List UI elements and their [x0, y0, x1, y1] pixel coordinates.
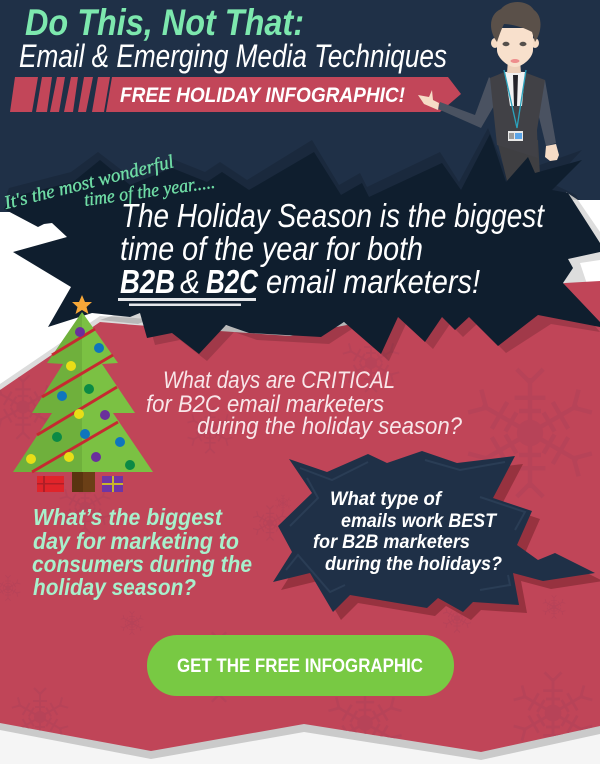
banner text: FREE HOLIDAY INFOGRAPHIC! — [120, 84, 405, 107]
grey shadow of red section bottom — [0, 700, 600, 760]
snowflakes background pattern — [0, 334, 593, 761]
title: Do This, Not That: Do This, Not That: — [25, 2, 304, 43]
small burst text: during the holidays? — [325, 554, 502, 575]
banner: free holiday infographic — [10, 77, 461, 112]
main statement line three: & — [180, 263, 200, 300]
main statement line three — [120, 263, 480, 300]
main statement line three: email marketers! — [266, 263, 480, 300]
mouth — [510, 59, 520, 63]
left arm — [438, 77, 502, 128]
green question — [32, 504, 252, 600]
right hand — [545, 144, 559, 161]
small burst shadow — [281, 459, 600, 620]
tree body right — [82, 312, 153, 472]
dark left header edge — [0, 200, 70, 212]
white band — [0, 190, 600, 390]
grey edge at right side — [560, 248, 600, 286]
presenter character — [418, 2, 559, 185]
eyes — [502, 42, 526, 46]
subtitle: Email & Emerging Media Techniques: Email & Emerging Media Techniques — [19, 38, 447, 74]
main dark burst — [4, 134, 600, 354]
left pointing hand — [418, 90, 439, 110]
id badge — [508, 131, 523, 141]
script line one: It's the most wonderful — [1, 151, 176, 214]
grey edge under top right burst — [566, 192, 600, 246]
question: critical days line three: during the holiday season? — [197, 413, 463, 440]
green question: holiday season? — [33, 574, 196, 600]
neck — [507, 60, 521, 73]
red gift — [37, 476, 64, 492]
face — [497, 28, 533, 67]
tree body left — [13, 312, 82, 472]
green question: day for marketing to — [33, 528, 239, 554]
shirt — [505, 72, 525, 106]
lanyard — [504, 70, 526, 128]
button label: GET THE FREE INFOGRAPHIC — [177, 656, 423, 677]
main statement line three: B2C — [206, 263, 259, 300]
question: critical days line two: for B2C email marketers — [146, 391, 384, 418]
green question: consumers during the — [32, 551, 252, 577]
question: critical days line one: What days are CRITICAL — [163, 367, 395, 394]
trousers — [497, 140, 540, 185]
grey shadow of red section top — [0, 290, 560, 400]
burst shadow top — [5, 128, 581, 200]
small burst text: What type of — [330, 489, 443, 510]
christmas tree — [13, 295, 153, 492]
small burst inner highlights — [286, 460, 525, 592]
main statement line three: B2B — [120, 263, 175, 300]
double underline — [118, 298, 256, 306]
dark navy header background — [0, 0, 600, 200]
small burst text: for B2B marketers — [313, 532, 470, 553]
garlands — [32, 329, 118, 472]
star — [72, 295, 92, 314]
tie — [513, 75, 518, 106]
ornaments — [26, 327, 135, 470]
ears — [491, 38, 499, 48]
small burst — [273, 451, 595, 612]
cta button — [147, 635, 454, 696]
script line two: time of the year..... — [83, 172, 216, 211]
main statement line two: time of the year for both — [120, 230, 423, 267]
right arm — [530, 80, 556, 146]
burst shadow bottom — [100, 247, 600, 361]
suit jacket — [490, 71, 545, 158]
green question: What’s the biggest — [33, 504, 223, 530]
small burst text — [313, 489, 502, 575]
trunk — [72, 472, 95, 492]
purple gift — [102, 476, 123, 492]
small burst text: emails work BEST — [341, 511, 497, 532]
red section — [0, 281, 600, 752]
hair — [491, 2, 540, 42]
